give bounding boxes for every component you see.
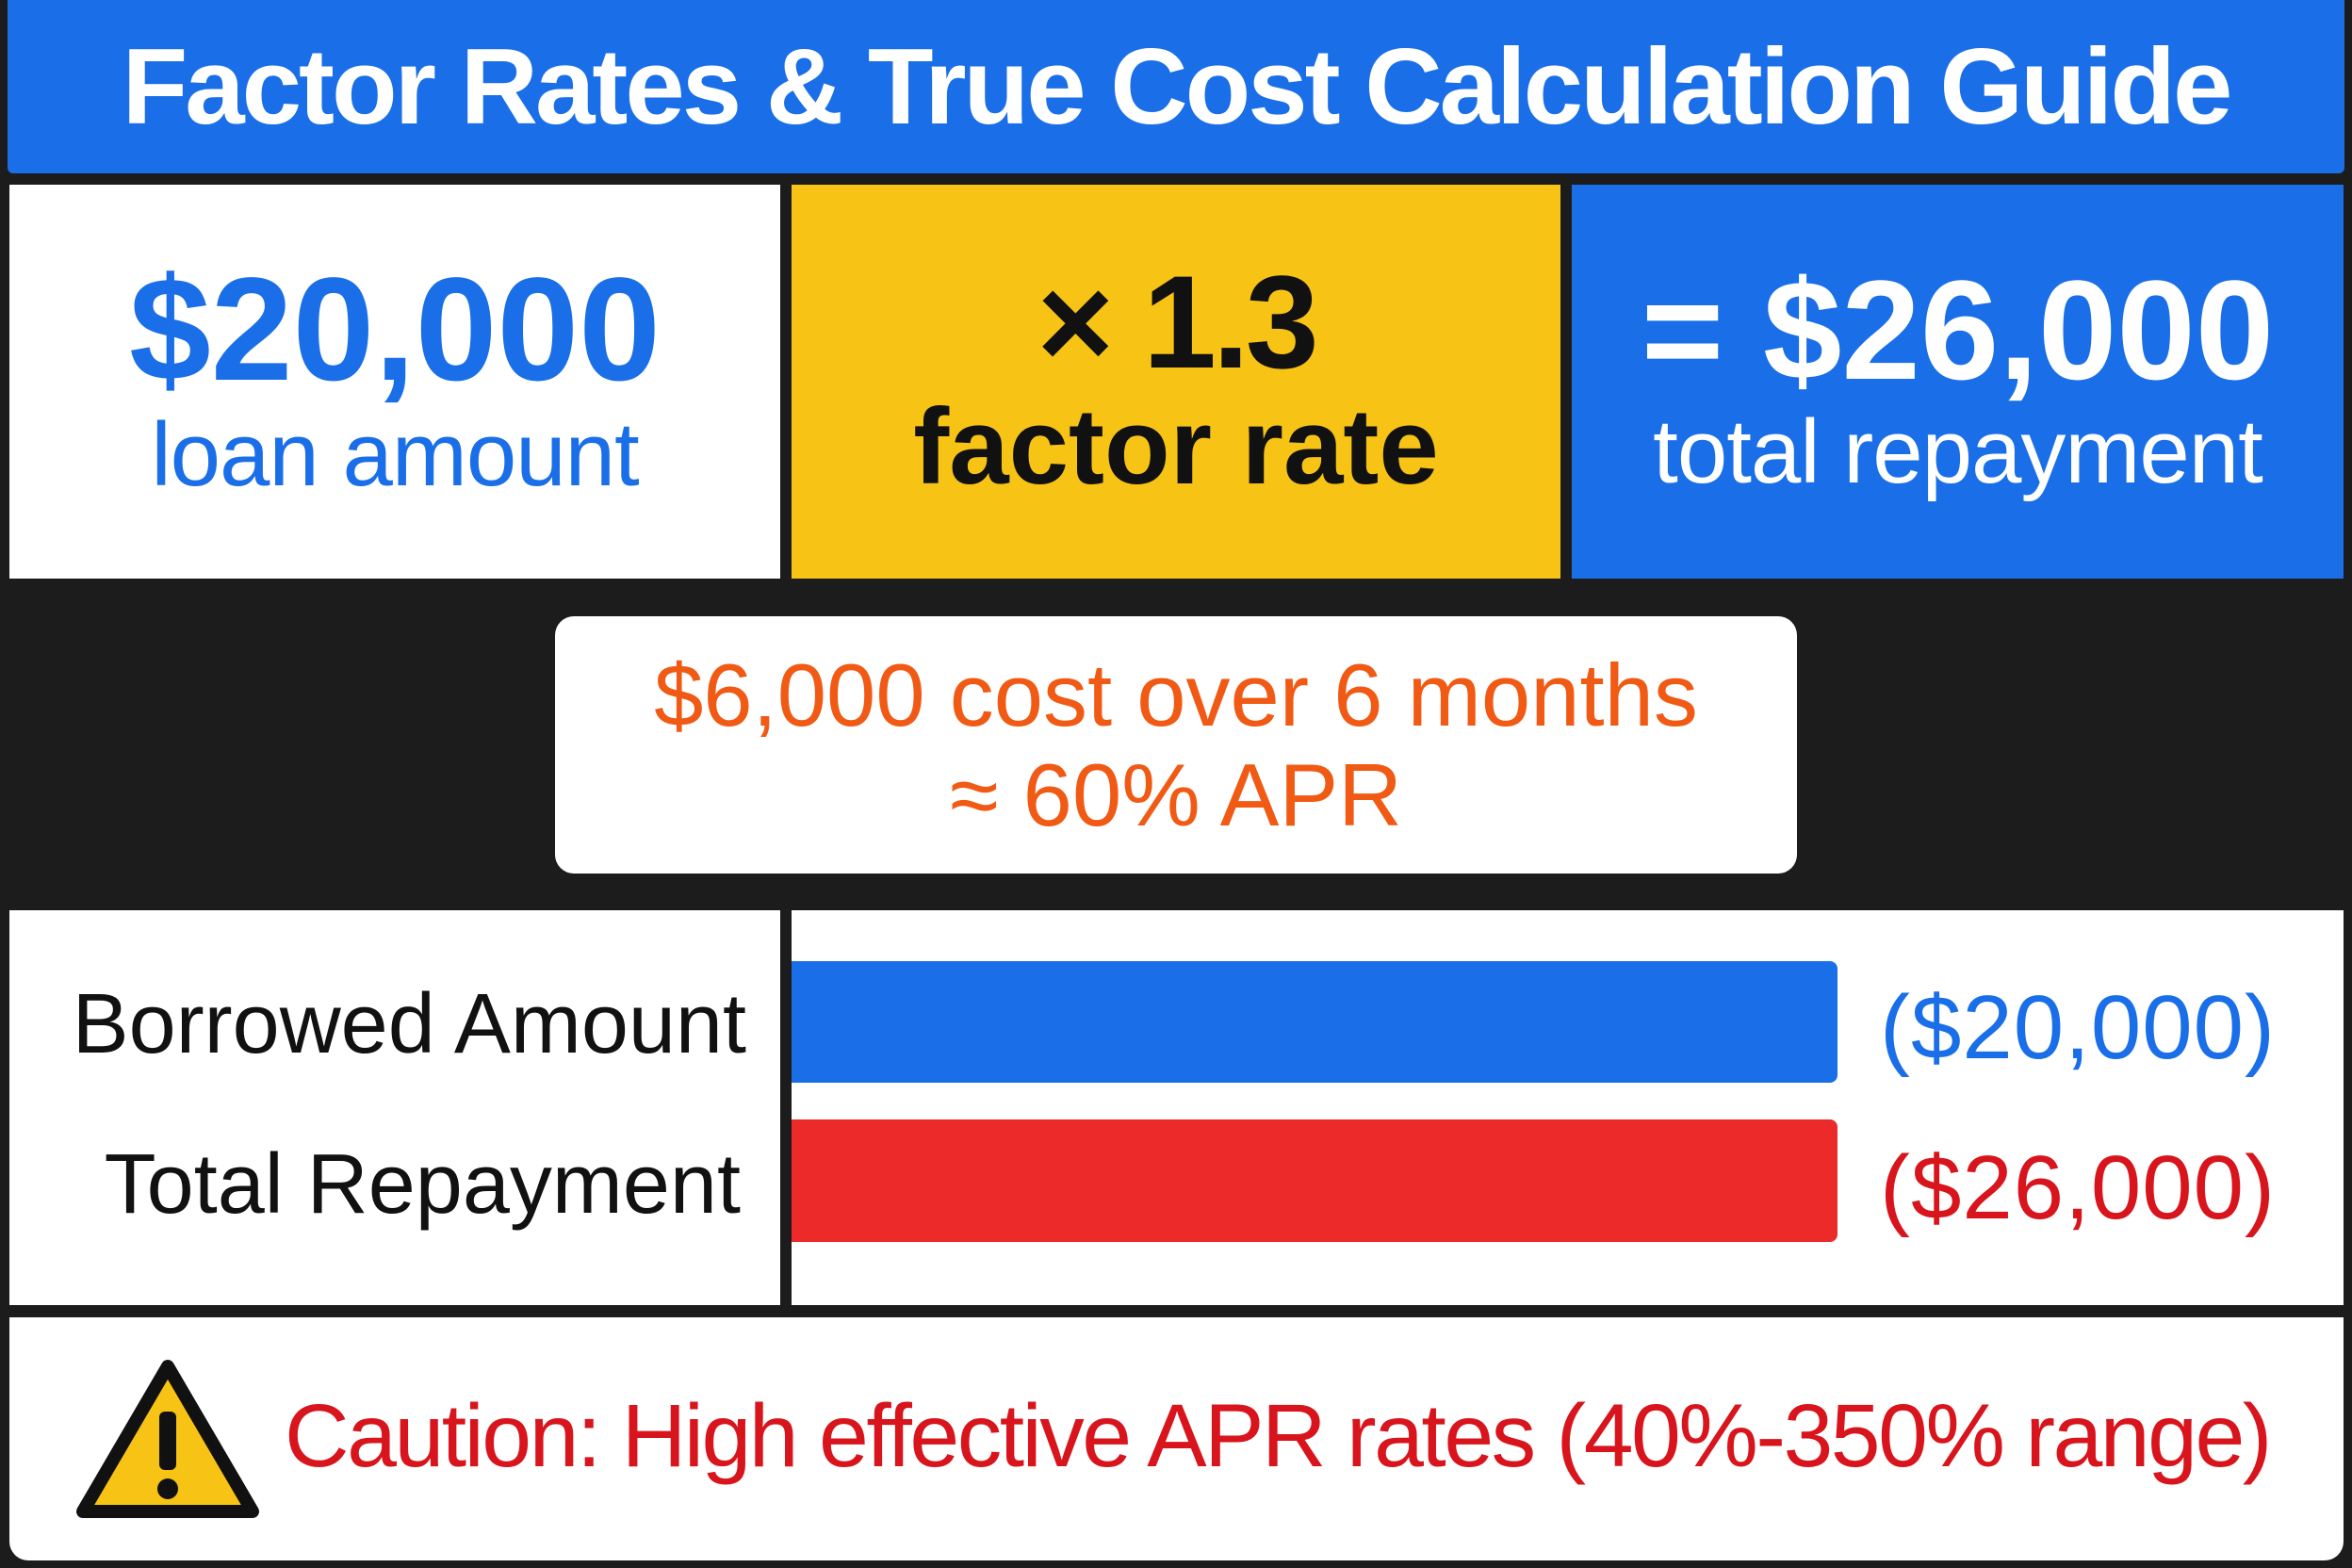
icon: warning xyxy=(76,1360,259,1518)
panel: total repayment xyxy=(1572,185,2344,579)
panel: loan amount: loan amount xyxy=(151,404,639,505)
bar: repayment xyxy=(792,1119,1838,1242)
bar chart xyxy=(792,910,2344,1305)
panel: bar labels xyxy=(9,910,780,1305)
value: borrowed: ($20,000) xyxy=(1880,977,2276,1078)
panel: factor rate: × 1.3 xyxy=(1037,248,1315,396)
panel: total repayment: total repayment xyxy=(1653,401,2262,502)
callout: cost and APR xyxy=(555,616,1797,874)
title bar xyxy=(8,0,2344,173)
bar: borrowed xyxy=(792,961,1838,1083)
caution text: Caution: High effective APR rates (40%-350% range) xyxy=(285,1386,2270,1486)
panel: loan amount: $20,000 xyxy=(129,248,661,412)
value: repayment: ($26,000) xyxy=(1880,1137,2276,1238)
panel: bar labels: Borrowed Amount xyxy=(73,977,746,1071)
callout: cost and APR: $6,000 cost over 6 months xyxy=(654,645,1698,744)
title bar: Factor Rates & True Cost Calculation Guide xyxy=(122,26,2230,147)
panel: total repayment: = $26,000 xyxy=(1642,251,2274,409)
panel: caution xyxy=(9,1317,2344,1560)
callout: cost and APR: ≈ 60% APR xyxy=(950,744,1402,844)
panel: factor rate: factor rate xyxy=(913,387,1439,507)
panel: bar labels: Total Repayment xyxy=(105,1137,741,1232)
panel: factor rate xyxy=(792,185,1560,579)
panel: loan amount xyxy=(9,185,780,579)
